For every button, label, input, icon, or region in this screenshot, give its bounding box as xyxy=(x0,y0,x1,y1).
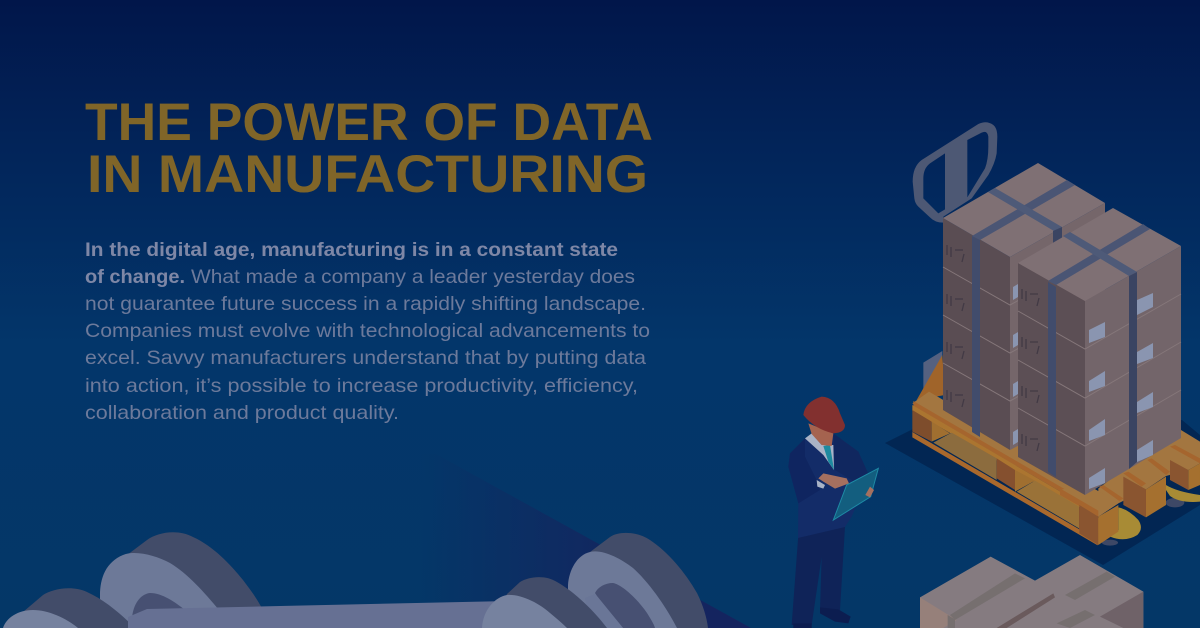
pallet right section and wheels xyxy=(1098,428,1200,546)
intro paragraph: into action, it’s possible to increase productivity, efficiency, xyxy=(85,375,638,397)
shirt xyxy=(805,433,834,470)
upper body xyxy=(788,397,878,538)
wheel rear left xyxy=(100,532,264,628)
intro paragraph xyxy=(85,239,650,424)
jacket xyxy=(788,433,874,538)
pallet truck handle xyxy=(913,122,997,223)
face xyxy=(808,423,833,446)
intro paragraph: not guarantee future success in a rapidly shifting landscape. xyxy=(85,293,646,315)
front box stack xyxy=(1018,208,1181,495)
tie xyxy=(823,445,834,470)
hard hat xyxy=(803,397,845,433)
intro paragraph: In the digital age, manufacturing is in a constant state xyxy=(85,239,618,261)
pallet floor shadow xyxy=(885,420,1200,565)
title xyxy=(85,93,653,204)
tablet xyxy=(833,468,878,520)
end block of the pallet xyxy=(1060,483,1118,545)
intro paragraph: Companies must evolve with technological advancements to xyxy=(85,320,650,342)
forks behind pallet xyxy=(917,351,945,400)
intro paragraph: of change. xyxy=(85,266,185,288)
diagonal floor shadow xyxy=(420,454,751,628)
worker with hard hat and tablet xyxy=(788,397,878,628)
cardboard boxes, foreground xyxy=(920,555,1143,628)
title: IN MANUFACTURING xyxy=(87,145,648,204)
legs and shoes xyxy=(792,527,851,628)
wheel front right xyxy=(482,577,607,628)
intro paragraph: What made a company a leader yesterday does xyxy=(191,266,635,288)
pallet truck with stacked boxes xyxy=(885,122,1200,565)
intro paragraph: excel. Savvy manufacturers understand that by putting data xyxy=(85,347,646,369)
wheel rear right xyxy=(568,533,708,628)
roller shaft xyxy=(128,601,520,628)
intro paragraph: collaboration and product quality. xyxy=(85,402,399,424)
title: THE POWER OF DATA xyxy=(85,93,653,152)
wheel front left xyxy=(3,588,135,628)
hand and cuff xyxy=(817,473,849,489)
pallet left section xyxy=(912,392,1105,545)
back box stack xyxy=(943,163,1105,450)
holding hand xyxy=(865,487,874,497)
machine: roller with wheels xyxy=(3,532,708,628)
